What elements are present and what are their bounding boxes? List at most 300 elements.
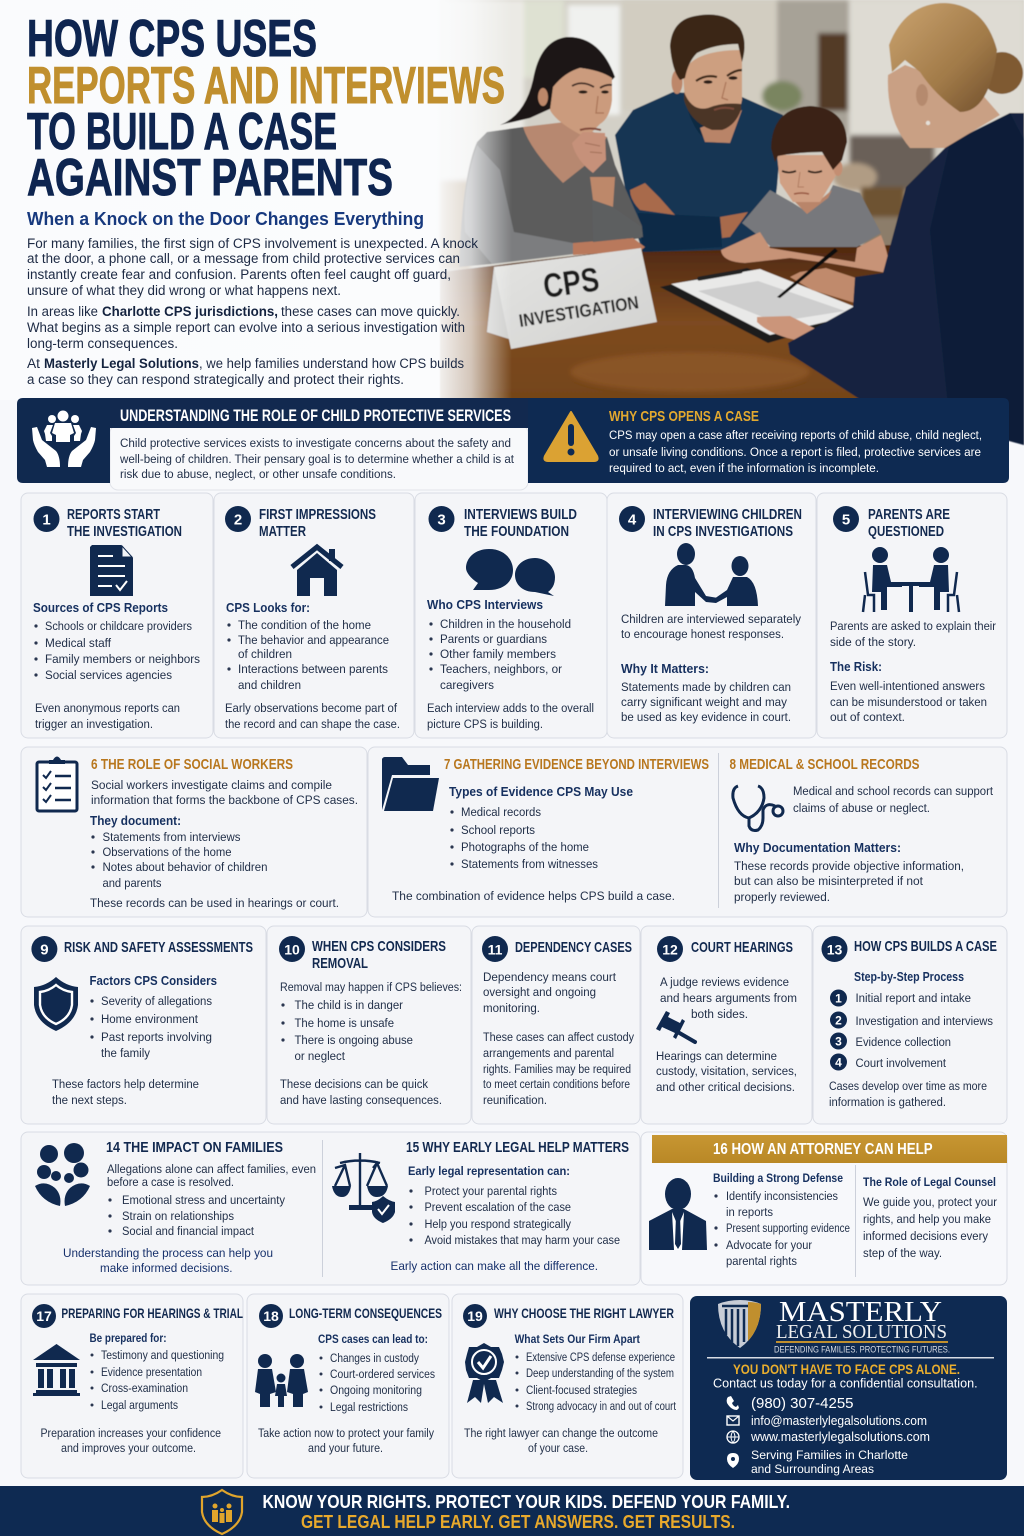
consequences list: CPS cases can lead to:: [318, 1332, 428, 1346]
icon: clipboard checklist: [37, 756, 77, 811]
icon: family hearts: [35, 1143, 90, 1206]
note: [464, 1426, 658, 1455]
description: [91, 778, 358, 807]
why it matters: carry significant weight and may: [621, 695, 788, 709]
note: the record and can shape the case.: [225, 717, 400, 731]
heading: DEPENDENCY CASES: [515, 939, 632, 956]
role of legal counsel: [863, 1175, 997, 1260]
early help list: Help you respond strategically: [424, 1217, 572, 1231]
looks-for list: of children: [238, 647, 292, 661]
heading: INTERVIEWS BUILD: [464, 506, 577, 523]
factors list: the family: [101, 1046, 151, 1060]
woman: [459, 127, 642, 267]
name sign: [487, 267, 512, 340]
early help list: Avoid mistakes that may harm your case: [424, 1233, 620, 1247]
firm strengths list: Strong advocacy in and out of court: [526, 1399, 676, 1413]
footer slogan: KNOW YOUR RIGHTS. PROTECT YOUR KIDS. DEFEND YOUR FAMILY.: [262, 1491, 790, 1512]
intro text: these cases can move quickly.: [281, 304, 460, 319]
who list: Who CPS Interviews: [427, 598, 543, 612]
explanation: to encourage honest responses.: [621, 627, 784, 641]
process steps: Initial report and intake: [856, 991, 971, 1005]
note: Even anonymous reports can: [35, 701, 180, 715]
note: and have lasting consequences.: [280, 1093, 442, 1107]
card 19: why choose the right lawyer: [452, 1294, 683, 1478]
firm strengths list: Extensive CPS defense experience: [526, 1350, 675, 1364]
description: and hears arguments from: [660, 991, 797, 1005]
effects: These cases can affect custody: [483, 1030, 635, 1044]
medical text: Medical and school records can support: [793, 784, 994, 798]
the risk: Even well-intentioned answers: [830, 679, 985, 693]
icon: two people at table: [863, 547, 959, 612]
they document list: Observations of the home: [102, 845, 232, 859]
firm strengths list: What Sets Our Firm Apart: [515, 1332, 640, 1346]
heading: FIRST IMPRESSIONS: [259, 506, 376, 523]
firm strengths list: Client-focused strategies: [526, 1383, 637, 1397]
note: Early observations become part of: [225, 701, 398, 715]
evidence list: Medical records: [461, 805, 541, 819]
note: Take action now to protect your family: [258, 1426, 435, 1440]
footer call to action: GET LEGAL HELP EARLY. GET ANSWERS. GET RESULTS.: [301, 1511, 735, 1532]
building a strong defense: Identify inconsistencies: [726, 1189, 838, 1203]
boy: [742, 185, 881, 247]
card 9: risk and safety assessments: [21, 926, 266, 1124]
building a strong defense: parental rights: [726, 1254, 797, 1268]
note: information is gathered.: [829, 1095, 946, 1109]
location: Serving Families in Charlotte: [751, 1448, 908, 1462]
card 2: first impressions matter: [214, 493, 414, 738]
number badge: 3: [437, 512, 446, 528]
effects: to meet certain conditions before: [483, 1077, 630, 1091]
looks-for list: The behavior and appearance: [238, 633, 389, 647]
consequences list: Legal restrictions: [330, 1400, 408, 1414]
preparation list: [90, 1331, 224, 1412]
note: [427, 701, 594, 731]
tagline: YOU DON'T HAVE TO FACE CPS ALONE.: [733, 1361, 960, 1377]
who list: Parents or guardians: [440, 632, 547, 646]
process steps: Court involvement: [856, 1056, 947, 1070]
process steps: 3: [835, 1034, 842, 1048]
number badge: [482, 936, 508, 962]
the risk: The Risk:: [830, 660, 882, 674]
icon: attorney silhouette: [649, 1178, 707, 1250]
icon: folder: [382, 757, 439, 811]
firm name: DEFENDING FAMILIES. PROTECTING FUTURES.: [774, 1344, 950, 1354]
callout 14: Understanding the process can help you: [63, 1246, 273, 1260]
note: and improves your outcome.: [61, 1441, 196, 1455]
card 14 and 15: impact and early legal help: [21, 1132, 640, 1285]
icon: shield: [34, 977, 78, 1031]
building a strong defense: Building a Strong Defense: [713, 1171, 843, 1185]
heading: WHEN CPS CONSIDERS: [312, 938, 446, 955]
sources list: [33, 601, 200, 682]
who list: Teachers, neighbors, or: [440, 662, 562, 676]
card 16: how an attorney can help: [641, 1132, 1007, 1285]
firm name: MASTERLY: [779, 1297, 942, 1328]
intro text: What begins as a simple report can evolve into a serious investigation with: [27, 320, 465, 335]
intro subheading: When a Knock on the Door Changes Everything: [27, 208, 424, 229]
icon: stethoscope: [733, 786, 783, 830]
number badge: 4: [628, 512, 637, 528]
icon: adult and child: [665, 543, 758, 606]
number badge: [822, 936, 848, 962]
preparation list: Testimony and questioning: [101, 1348, 224, 1362]
number badge: [619, 506, 645, 532]
heading: [312, 938, 446, 972]
number badge: [32, 1304, 56, 1328]
panel: why CPS opens a case: [528, 398, 1009, 483]
website: www.masterlylegalsolutions.com: [750, 1430, 930, 1444]
heading: PREPARING FOR HEARINGS & TRIAL: [61, 1305, 243, 1321]
card 13: how CPS builds a case: [813, 926, 1007, 1124]
note: [829, 1079, 987, 1109]
building a strong defense: Present supporting evidence: [726, 1221, 850, 1235]
early help list: Early legal representation can:: [408, 1164, 570, 1178]
callout 14: make informed decisions.: [100, 1261, 232, 1275]
effects: [483, 1030, 635, 1107]
intro text: long-term consequences.: [27, 336, 178, 351]
removal list: The home is unsafe: [294, 1016, 394, 1030]
process steps: Step-by-Step Process: [854, 970, 964, 984]
icon: shield with family: [202, 1490, 242, 1534]
factors list: Past reports involving: [101, 1030, 212, 1044]
definition: monitoring.: [483, 1001, 540, 1015]
effects: rights. Families may be required: [483, 1062, 631, 1076]
intro text: For many families, the first sign of CPS involvement is unexpected. A knock: [27, 236, 478, 251]
evidence list: Statements from witnesses: [461, 857, 598, 871]
callout 15: Early action can make all the difference.: [390, 1259, 598, 1273]
medical text: [793, 784, 994, 815]
who list: [427, 598, 571, 692]
number badge: [279, 936, 305, 962]
gold header: 16 HOW AN ATTORNEY CAN HELP: [713, 1141, 933, 1158]
note: and your future.: [308, 1441, 383, 1455]
number badge: 10: [284, 942, 300, 958]
note: These factors help determine: [52, 1077, 199, 1091]
they document list: and parents: [102, 876, 162, 890]
firm strengths list: Deep understanding of the system: [526, 1366, 674, 1380]
medical text: claims of abuse or neglect.: [793, 801, 930, 815]
logo shield: [718, 1300, 761, 1348]
note: These records can be used in hearings or court.: [90, 896, 339, 910]
preparation list: Legal arguments: [101, 1398, 178, 1412]
icon: speech bubbles: [466, 549, 555, 596]
number badge: 17: [36, 1308, 52, 1324]
note: of your case.: [528, 1441, 588, 1455]
impact text: Social and financial impact: [122, 1224, 255, 1238]
heading: PARENTS ARE: [868, 506, 950, 523]
icon: family: [255, 1354, 308, 1407]
preparation list: Be prepared for:: [90, 1331, 166, 1345]
number badge: 18: [263, 1308, 279, 1324]
why it matters: Why It Matters:: [621, 662, 709, 676]
process steps: [830, 970, 993, 1070]
evidence list: School reports: [461, 823, 535, 837]
icon: courthouse: [33, 1344, 80, 1396]
body text: or unsafe living conditions. Once a report is filed, protective services are: [609, 445, 981, 459]
explanation: Children are interviewed separately: [621, 612, 802, 626]
firm strengths list: [515, 1332, 676, 1413]
intro text: instantly create fear and confusion. Parents often feel caught off guard,: [27, 267, 451, 282]
consequences list: [318, 1332, 435, 1414]
sources list: Sources of CPS Reports: [33, 601, 168, 615]
tagline: [713, 1361, 978, 1390]
removal list: Removal may happen if CPS believes:: [280, 980, 462, 994]
role of legal counsel: The Role of Legal Counsel: [863, 1175, 996, 1189]
removal list: or neglect: [294, 1049, 346, 1063]
intro text: [27, 236, 478, 387]
heading: 6 THE ROLE OF SOCIAL WORKERS: [91, 756, 293, 773]
explanation: [830, 619, 996, 649]
title: TO BUILD A CASE: [27, 103, 337, 161]
note 7: The combination of evidence helps CPS build a case.: [392, 889, 675, 903]
the risk: can be misunderstood or taken: [830, 695, 987, 709]
evidence list: Photographs of the home: [461, 840, 589, 854]
intro text: At: [27, 356, 40, 371]
heading: IN CPS INVESTIGATIONS: [653, 523, 793, 540]
callout 14: [63, 1246, 273, 1275]
body text: [119, 436, 515, 481]
title: [27, 10, 505, 207]
card 18: long-term consequences: [247, 1294, 449, 1478]
note: [35, 701, 180, 731]
early help list: Prevent escalation of the case: [424, 1200, 571, 1214]
explanation: Parents are asked to explain their: [830, 619, 996, 633]
heading: RISK AND SAFETY ASSESSMENTS: [64, 939, 253, 956]
card 4: interviewing children: [607, 493, 816, 738]
title: REPORTS AND INTERVIEWS: [27, 57, 505, 115]
process steps: 2: [835, 1014, 842, 1028]
they document list: Statements from interviews: [102, 830, 240, 844]
definition: Dependency means court: [483, 970, 617, 984]
intro text: , we help families understand how CPS builds: [199, 356, 464, 371]
impact text: [107, 1162, 316, 1238]
intro text: In areas like: [27, 304, 98, 319]
looks-for list: [226, 601, 389, 692]
footer banner: [0, 1486, 1024, 1536]
description: information that forms the backbone of CPS cases.: [91, 793, 358, 807]
number badge: [225, 506, 251, 532]
body text: well-being of children. Their pensary goal is to determine whether a child is at: [119, 452, 515, 466]
card 10: when CPS considers removal: [267, 926, 471, 1124]
preparation list: Evidence presentation: [101, 1365, 202, 1379]
heading 14: 14 THE IMPACT ON FAMILIES: [106, 1139, 283, 1156]
panel: understanding the role of child protective services: [17, 398, 528, 490]
heading: [464, 506, 577, 540]
panel: contact and firm branding: [690, 1296, 1007, 1480]
firm name: [774, 1297, 950, 1354]
effects: arrangements and parental: [483, 1046, 614, 1060]
body text: required to act, even if the information is incomplete.: [609, 461, 879, 475]
building a strong defense: in reports: [726, 1205, 773, 1219]
card 3: interviews build the foundation: [415, 493, 607, 738]
they document list: [90, 814, 268, 890]
card 1: reports start the investigation: [21, 493, 213, 738]
lawyer: [757, 316, 818, 341]
heading: WHY CHOOSE THE RIGHT LAWYER: [494, 1305, 674, 1321]
number badge: 19: [467, 1308, 483, 1324]
phone: (980) 307-4255: [751, 1395, 854, 1412]
man: [615, 92, 783, 252]
number badge: [34, 506, 60, 532]
number badge: [833, 506, 859, 532]
card 7 and 8: evidence and records: [368, 747, 1007, 917]
note: picture CPS is building.: [427, 717, 543, 731]
card 5: parents are questioned: [817, 493, 1007, 738]
process steps: 4: [835, 1056, 842, 1070]
note: Preparation increases your confidence: [40, 1426, 221, 1440]
number badge: 11: [488, 942, 503, 958]
heading: THE FOUNDATION: [464, 523, 569, 540]
number badge: [657, 936, 683, 962]
icon: scales of justice with shield: [332, 1153, 395, 1223]
process steps: Evidence collection: [856, 1035, 951, 1049]
factors list: Factors CPS Considers: [90, 974, 217, 988]
card 11: dependency cases: [472, 926, 640, 1124]
heading: MATTER: [259, 523, 306, 540]
consequences list: Changes in custody: [330, 1351, 420, 1365]
note: Cases develop over time as more: [829, 1079, 987, 1093]
they document list: Notes about behavior of children: [102, 860, 268, 874]
outcomes: Hearings can determine: [656, 1049, 777, 1063]
who list: caregivers: [440, 678, 494, 692]
note: [258, 1426, 435, 1455]
card 12: court hearings: [641, 926, 812, 1124]
early help list: [408, 1164, 620, 1247]
heading: [67, 506, 182, 540]
why it matters: be used as key evidence in court.: [621, 710, 791, 724]
why documentation matters: [734, 841, 964, 904]
description: both sides.: [691, 1007, 748, 1021]
heading 15: 15 WHY EARLY LEGAL HELP MATTERS: [406, 1139, 629, 1156]
heading: REMOVAL: [312, 955, 368, 972]
looks-for list: CPS Looks for:: [226, 601, 310, 615]
why documentation matters: properly reviewed.: [734, 890, 830, 904]
factors list: Severity of allegations: [101, 994, 212, 1008]
evidence list: [449, 785, 633, 871]
impact text: Emotional stress and uncertainty: [122, 1193, 286, 1207]
number badge: 9: [40, 942, 49, 958]
hero photo: family meeting with CPS investigator: [440, 0, 1024, 445]
number badge: [259, 1304, 283, 1328]
the risk: [830, 660, 987, 724]
who list: Other family members: [440, 647, 556, 661]
gold header: [652, 1135, 1007, 1163]
heading: THE INVESTIGATION: [67, 523, 182, 540]
building a strong defense: [713, 1171, 850, 1268]
sources list: Schools or childcare providers: [45, 619, 192, 633]
heading: REPORTS START: [67, 506, 160, 523]
note: The right lawyer can change the outcome: [464, 1426, 658, 1440]
role of legal counsel: rights, and help you make: [863, 1212, 991, 1226]
card 17: preparing for hearings and trial: [21, 1294, 243, 1478]
intro text: at the door, a phone call, or a message from child protective services can: [27, 251, 460, 266]
heading: COURT HEARINGS: [691, 939, 793, 956]
removal list: [280, 980, 462, 1063]
clipboard and papers: [660, 268, 870, 343]
heading: QUESTIONED: [868, 523, 944, 540]
impact text: Allegations alone can affect families, even: [107, 1162, 316, 1176]
factors list: [90, 974, 217, 1060]
why documentation matters: Why Documentation Matters:: [734, 841, 901, 855]
number badge: [463, 1304, 487, 1328]
why it matters: [621, 662, 791, 724]
looks-for list: and children: [238, 678, 301, 692]
body text: CPS may open a case after receiving reports of child abuse, child neglect,: [609, 428, 982, 442]
why documentation matters: but can also be misinterpreted if not: [734, 874, 924, 888]
effects: reunification.: [483, 1093, 547, 1107]
number badge: [31, 936, 57, 962]
heading: [259, 506, 376, 540]
title: HOW CPS USES: [27, 10, 317, 68]
description: [660, 975, 797, 1021]
removal list: There is ongoing abuse: [294, 1033, 413, 1047]
note: [225, 701, 400, 731]
intro text: unsure of what they did wrong or what happens next.: [27, 283, 341, 298]
location: [727, 1448, 908, 1476]
preparation list: Cross-examination: [101, 1381, 188, 1395]
table: [440, 245, 1024, 400]
they document list: They document:: [90, 814, 181, 828]
heading 8: 8 MEDICAL & SCHOOL RECORDS: [730, 756, 920, 773]
process steps: Investigation and interviews: [856, 1014, 993, 1028]
explanation: [621, 612, 802, 641]
description: A judge reviews evidence: [660, 975, 789, 989]
definition: [483, 970, 617, 1015]
heading: INTERVIEWING CHILDREN: [653, 506, 802, 523]
why it matters: Statements made by children can: [621, 680, 791, 694]
sources list: Medical staff: [45, 636, 112, 650]
consequences list: Ongoing monitoring: [330, 1383, 422, 1397]
icon: house: [292, 547, 342, 596]
number badge: 13: [827, 942, 842, 958]
email: info@masterlylegalsolutions.com: [751, 1414, 927, 1428]
factors list: Home environment: [101, 1012, 199, 1026]
number badge: [428, 506, 454, 532]
note: These decisions can be quick: [280, 1077, 429, 1091]
role of legal counsel: informed decisions every: [863, 1229, 989, 1243]
early help list: Protect your parental rights: [424, 1184, 557, 1198]
impact text: Strain on relationships: [122, 1209, 234, 1223]
sources list: Social services agencies: [45, 668, 172, 682]
definition: oversight and ongoing: [483, 985, 596, 999]
why documentation matters: These records provide objective information,: [734, 859, 964, 873]
icon: hands holding family: [32, 410, 96, 467]
note: [52, 1077, 199, 1107]
number badge: 2: [234, 512, 242, 528]
the risk: out of context.: [830, 710, 905, 724]
sources list: Family members or neighbors: [45, 652, 200, 666]
heading: WHY CPS OPENS A CASE: [609, 408, 759, 425]
outcomes: and other critical decisions.: [656, 1080, 795, 1094]
icon: award ribbon: [465, 1343, 504, 1403]
intro text: Masterly Legal Solutions: [44, 356, 199, 371]
card 6: the role of social workers: [21, 747, 367, 917]
evidence list: Types of Evidence CPS May Use: [449, 785, 633, 799]
looks-for list: The condition of the home: [238, 618, 371, 632]
impact text: before a case is resolved.: [107, 1175, 234, 1189]
description: Social workers investigate claims and compile: [91, 778, 332, 792]
icon: gavel: [656, 1011, 695, 1042]
icon: warning triangle: [544, 412, 598, 461]
location: and Surrounding Areas: [751, 1462, 874, 1476]
heading: [868, 506, 950, 540]
note: the next steps.: [52, 1093, 127, 1107]
number badge: 5: [842, 512, 850, 528]
intro text: Charlotte CPS jurisdictions,: [102, 304, 278, 319]
number badge: 12: [662, 942, 678, 958]
firm name: LEGAL SOLUTIONS: [776, 1321, 947, 1343]
heading: LONG-TERM CONSEQUENCES: [289, 1305, 442, 1321]
